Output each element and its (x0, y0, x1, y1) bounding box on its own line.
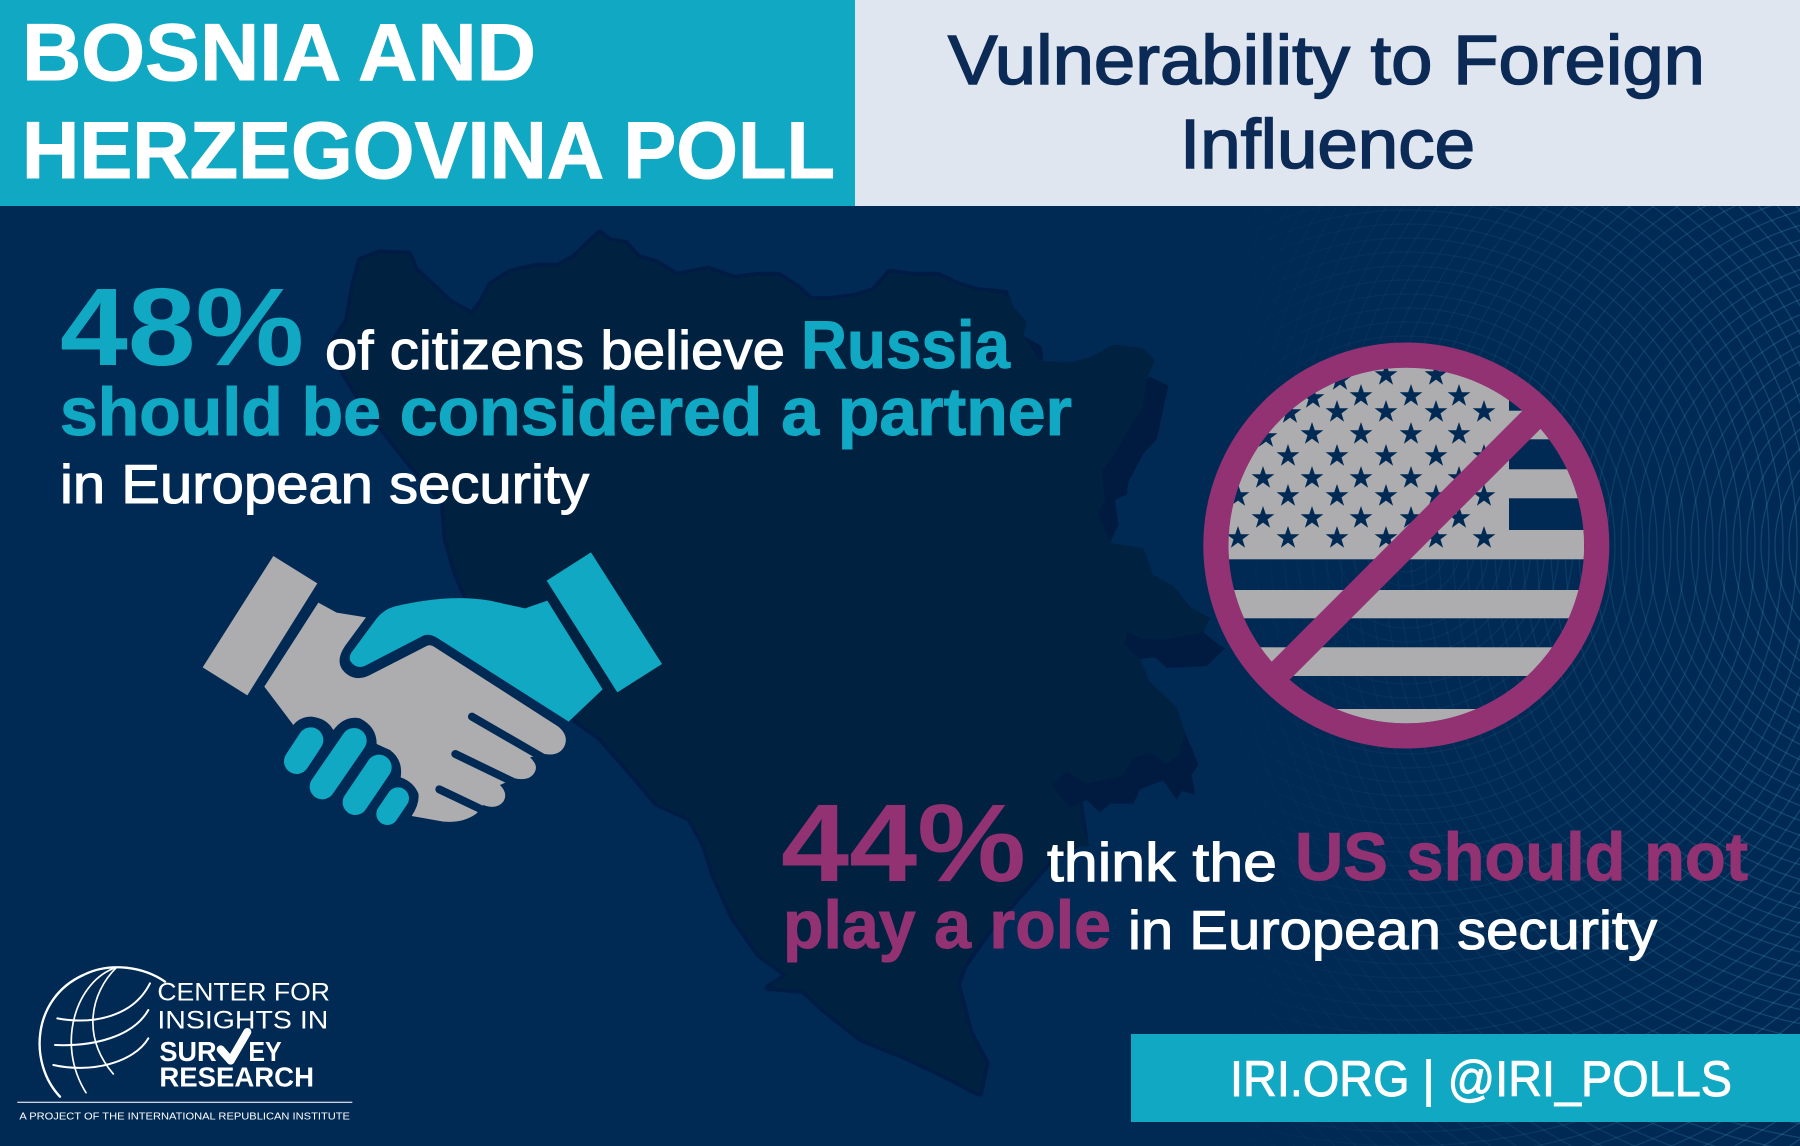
logo: Center for Insights in Survey Research (17, 967, 352, 1122)
finger gaps (439, 717, 544, 811)
subtitle text: Influence (1180, 105, 1475, 183)
title text: BOSNIA AND (22, 8, 536, 98)
logo wordmark (19, 979, 350, 1122)
logo wordmark: CENTER FOR (157, 979, 330, 1007)
logo wordmark: RESEARCH (159, 1062, 314, 1093)
statement: 48% Russia: in European security (60, 453, 590, 515)
footer: website and handle bar: IRI.ORG | @IRI_POLLS (1230, 1051, 1732, 1107)
footer: website and handle bar (1131, 1034, 1800, 1122)
statement: 44% US: US should not (1295, 819, 1748, 895)
left cuff (203, 556, 317, 695)
statement: 44% US: play a role (783, 887, 1111, 963)
icon: globe (40, 967, 165, 1097)
icon: crossed-out US flag (1216, 355, 1597, 736)
prohibition sign (1216, 355, 1597, 736)
right cuff (547, 552, 662, 692)
flag (1227, 363, 1584, 729)
header: subtitle panel (855, 0, 1800, 206)
statement: 44% US: 44% (781, 782, 1026, 905)
statement: 48% Russia (60, 266, 1072, 515)
stars (1227, 363, 1495, 548)
statement: 48% Russia: Russia (801, 307, 1011, 383)
grey hand (264, 603, 566, 822)
logo wordmark: A PROJECT OF THE INTERNATIONAL REPUBLICAN INSTITUTE (19, 1111, 350, 1122)
header: title panel (0, 0, 855, 206)
map: darker border slivers (1023, 336, 1225, 812)
title text (22, 8, 835, 196)
logo wordmark: INSIGHTS IN (157, 1006, 328, 1034)
subtitle text (948, 21, 1705, 183)
title text: HERZEGOVINA POLL (22, 106, 835, 196)
teal fingers (297, 740, 398, 814)
icon: check mark (221, 1032, 247, 1061)
statement: 44% US: in European security (1128, 899, 1658, 961)
map: eastern edge (1000, 296, 1210, 846)
logo wordmark: SUR (159, 1036, 217, 1067)
statement: 44% US (781, 782, 1748, 963)
icon: handshake (203, 552, 662, 822)
teal hand (350, 598, 603, 722)
map: Bosnia and Herzegovina silhouette (332, 233, 1225, 1093)
logo wordmark: EY (248, 1036, 282, 1067)
statement: 48% Russia: 48% (60, 266, 304, 389)
statement: 44% US: think the (1047, 831, 1277, 893)
statement: 48% Russia: of citizens believe (325, 319, 785, 381)
statement: 48% Russia: should be considered a partner (60, 374, 1072, 450)
subtitle text: Vulnerability to Foreign (948, 21, 1705, 99)
